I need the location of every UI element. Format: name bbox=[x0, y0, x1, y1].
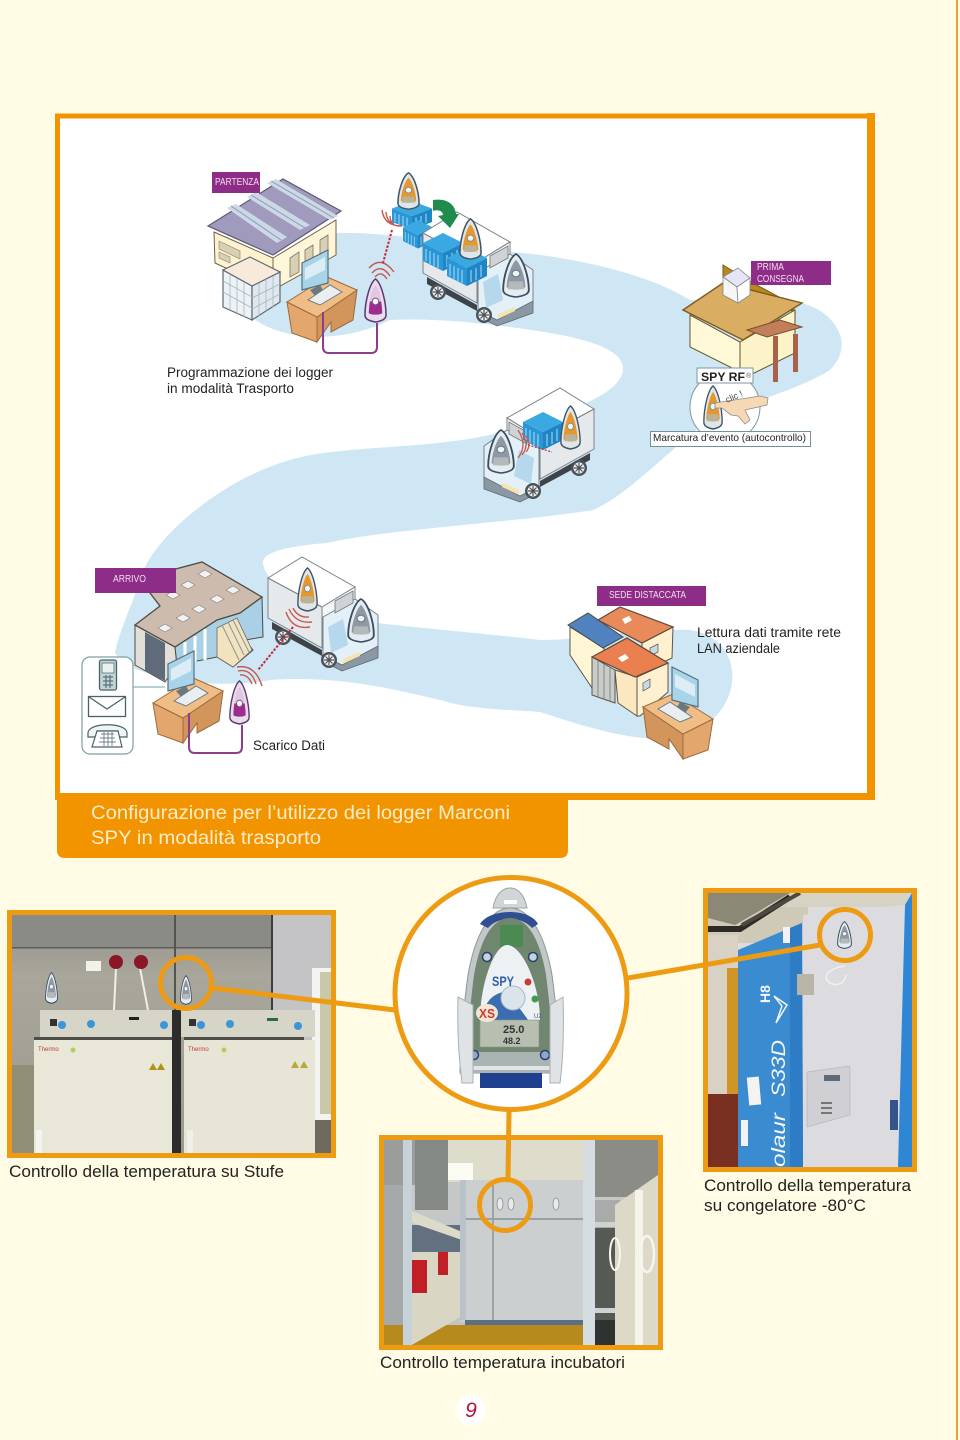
desk: branch workstation bbox=[643, 667, 713, 759]
photo: freezer: olaur bbox=[769, 1112, 790, 1167]
circular photo: SPY logger bbox=[395, 878, 627, 1110]
text: logger programming bbox=[167, 365, 333, 396]
title banner bbox=[57, 797, 568, 858]
label: event marking: Marcatura d’evento (autocontrollo) bbox=[653, 432, 806, 444]
caption: freezer: Controllo della temperatura bbox=[704, 1176, 912, 1195]
highlight circle: incubator logger bbox=[480, 1180, 530, 1230]
truck: transport stage one bbox=[423, 212, 533, 326]
caption: ovens: Controllo della temperatura su Stufe bbox=[9, 1162, 284, 1181]
logger device bbox=[458, 888, 563, 1088]
route ribbon bbox=[115, 233, 842, 739]
desk: download workstation bbox=[153, 651, 223, 743]
desk: programming workstation bbox=[287, 250, 357, 342]
right page edge bbox=[956, 0, 958, 1440]
label: SEDE DISTACCATA bbox=[597, 586, 706, 606]
photo: ovens: Thermo bbox=[38, 1047, 59, 1053]
page number bbox=[456, 1395, 486, 1425]
label: PRIMA CONSEGNA bbox=[751, 261, 831, 285]
label: click: clic ! bbox=[724, 388, 744, 405]
building: departure warehouse bbox=[208, 179, 341, 320]
cable: logger to workstation bbox=[323, 312, 377, 353]
wireless signal: arrival bbox=[237, 627, 293, 686]
label: PRIMA CONSEGNA: PRIMA bbox=[757, 262, 784, 273]
highlight circle: oven logger bbox=[160, 958, 212, 1008]
icon: logger button bbox=[704, 386, 722, 429]
label: SEDE DISTACCATA: SEDE DISTACCATA bbox=[609, 590, 686, 601]
icon: telephone bbox=[88, 725, 127, 747]
text: LAN data reading: Lettura dati tramite rete bbox=[697, 625, 841, 640]
text: LAN data reading: LAN aziendale bbox=[697, 641, 780, 656]
title banner: SPY in modalità trasporto bbox=[91, 827, 321, 849]
photo: freezer bbox=[706, 890, 914, 1170]
truck: transport stage two bbox=[484, 388, 594, 502]
label: PARTENZA: PARTENZA bbox=[215, 177, 259, 188]
panel: transport workflow diagram bbox=[55, 113, 875, 800]
page number: 9 bbox=[465, 1399, 477, 1422]
icon: pressing hand bbox=[715, 396, 768, 424]
icon: logger in crates bbox=[392, 173, 433, 248]
caption: freezer bbox=[704, 1176, 912, 1215]
text: logger programming: Programmazione dei logger bbox=[167, 365, 333, 380]
connector lines bbox=[213, 945, 820, 1180]
logger device: 48.2 bbox=[503, 1036, 521, 1046]
connector: desk to contact panel bbox=[133, 686, 165, 688]
logger device: U2 bbox=[534, 1014, 542, 1020]
caption: incubators: Controllo temperatura incubatori bbox=[380, 1353, 625, 1372]
icon: purple logger departure bbox=[365, 279, 386, 322]
photo: freezer: H8 bbox=[757, 985, 773, 1003]
label: SPY RF bbox=[697, 368, 753, 384]
label: ARRIVO: ARRIVO bbox=[113, 574, 146, 585]
label: PRIMA CONSEGNA: CONSEGNA bbox=[757, 274, 804, 285]
icon: envelope bbox=[88, 696, 126, 716]
photo: incubators bbox=[382, 1138, 660, 1348]
photo: ovens bbox=[10, 912, 334, 1156]
label: SPY RF: ® bbox=[746, 372, 752, 380]
building: first delivery house bbox=[683, 265, 802, 382]
photo: freezer: S33D bbox=[769, 1040, 790, 1097]
title banner: Configurazione per l’utilizzo dei logger Marconi bbox=[91, 802, 510, 824]
arrow: load into truck bbox=[433, 200, 459, 228]
icon group: notification channels bbox=[82, 657, 133, 754]
callout: SPY RF event marking bbox=[650, 368, 810, 446]
icon: mobile phone bbox=[100, 660, 116, 690]
text: logger programming: in modalità Trasporto bbox=[167, 381, 294, 396]
caption: freezer: su congelatore -80°C bbox=[704, 1196, 866, 1215]
highlight circle: freezer logger bbox=[820, 910, 870, 960]
logger device: 25.0 bbox=[503, 1024, 524, 1036]
text: data download: Scarico Dati bbox=[253, 738, 325, 753]
wireless signal: departure bbox=[369, 210, 402, 279]
logger device: SPY bbox=[492, 973, 515, 989]
cable: download logger to workstation bbox=[189, 713, 242, 753]
truck: arrival stage bbox=[268, 557, 378, 671]
building: arrival facility bbox=[135, 562, 263, 682]
logger device: XS bbox=[479, 1006, 495, 1021]
photo: ovens: Thermo bbox=[188, 1047, 209, 1053]
building: branch office bbox=[568, 607, 673, 716]
icon: purple logger arrival bbox=[230, 681, 249, 724]
label: PARTENZA bbox=[212, 172, 260, 193]
label: ARRIVO bbox=[95, 568, 176, 593]
text: LAN data reading bbox=[697, 625, 841, 656]
label: SPY RF: SPY RF bbox=[701, 370, 745, 384]
